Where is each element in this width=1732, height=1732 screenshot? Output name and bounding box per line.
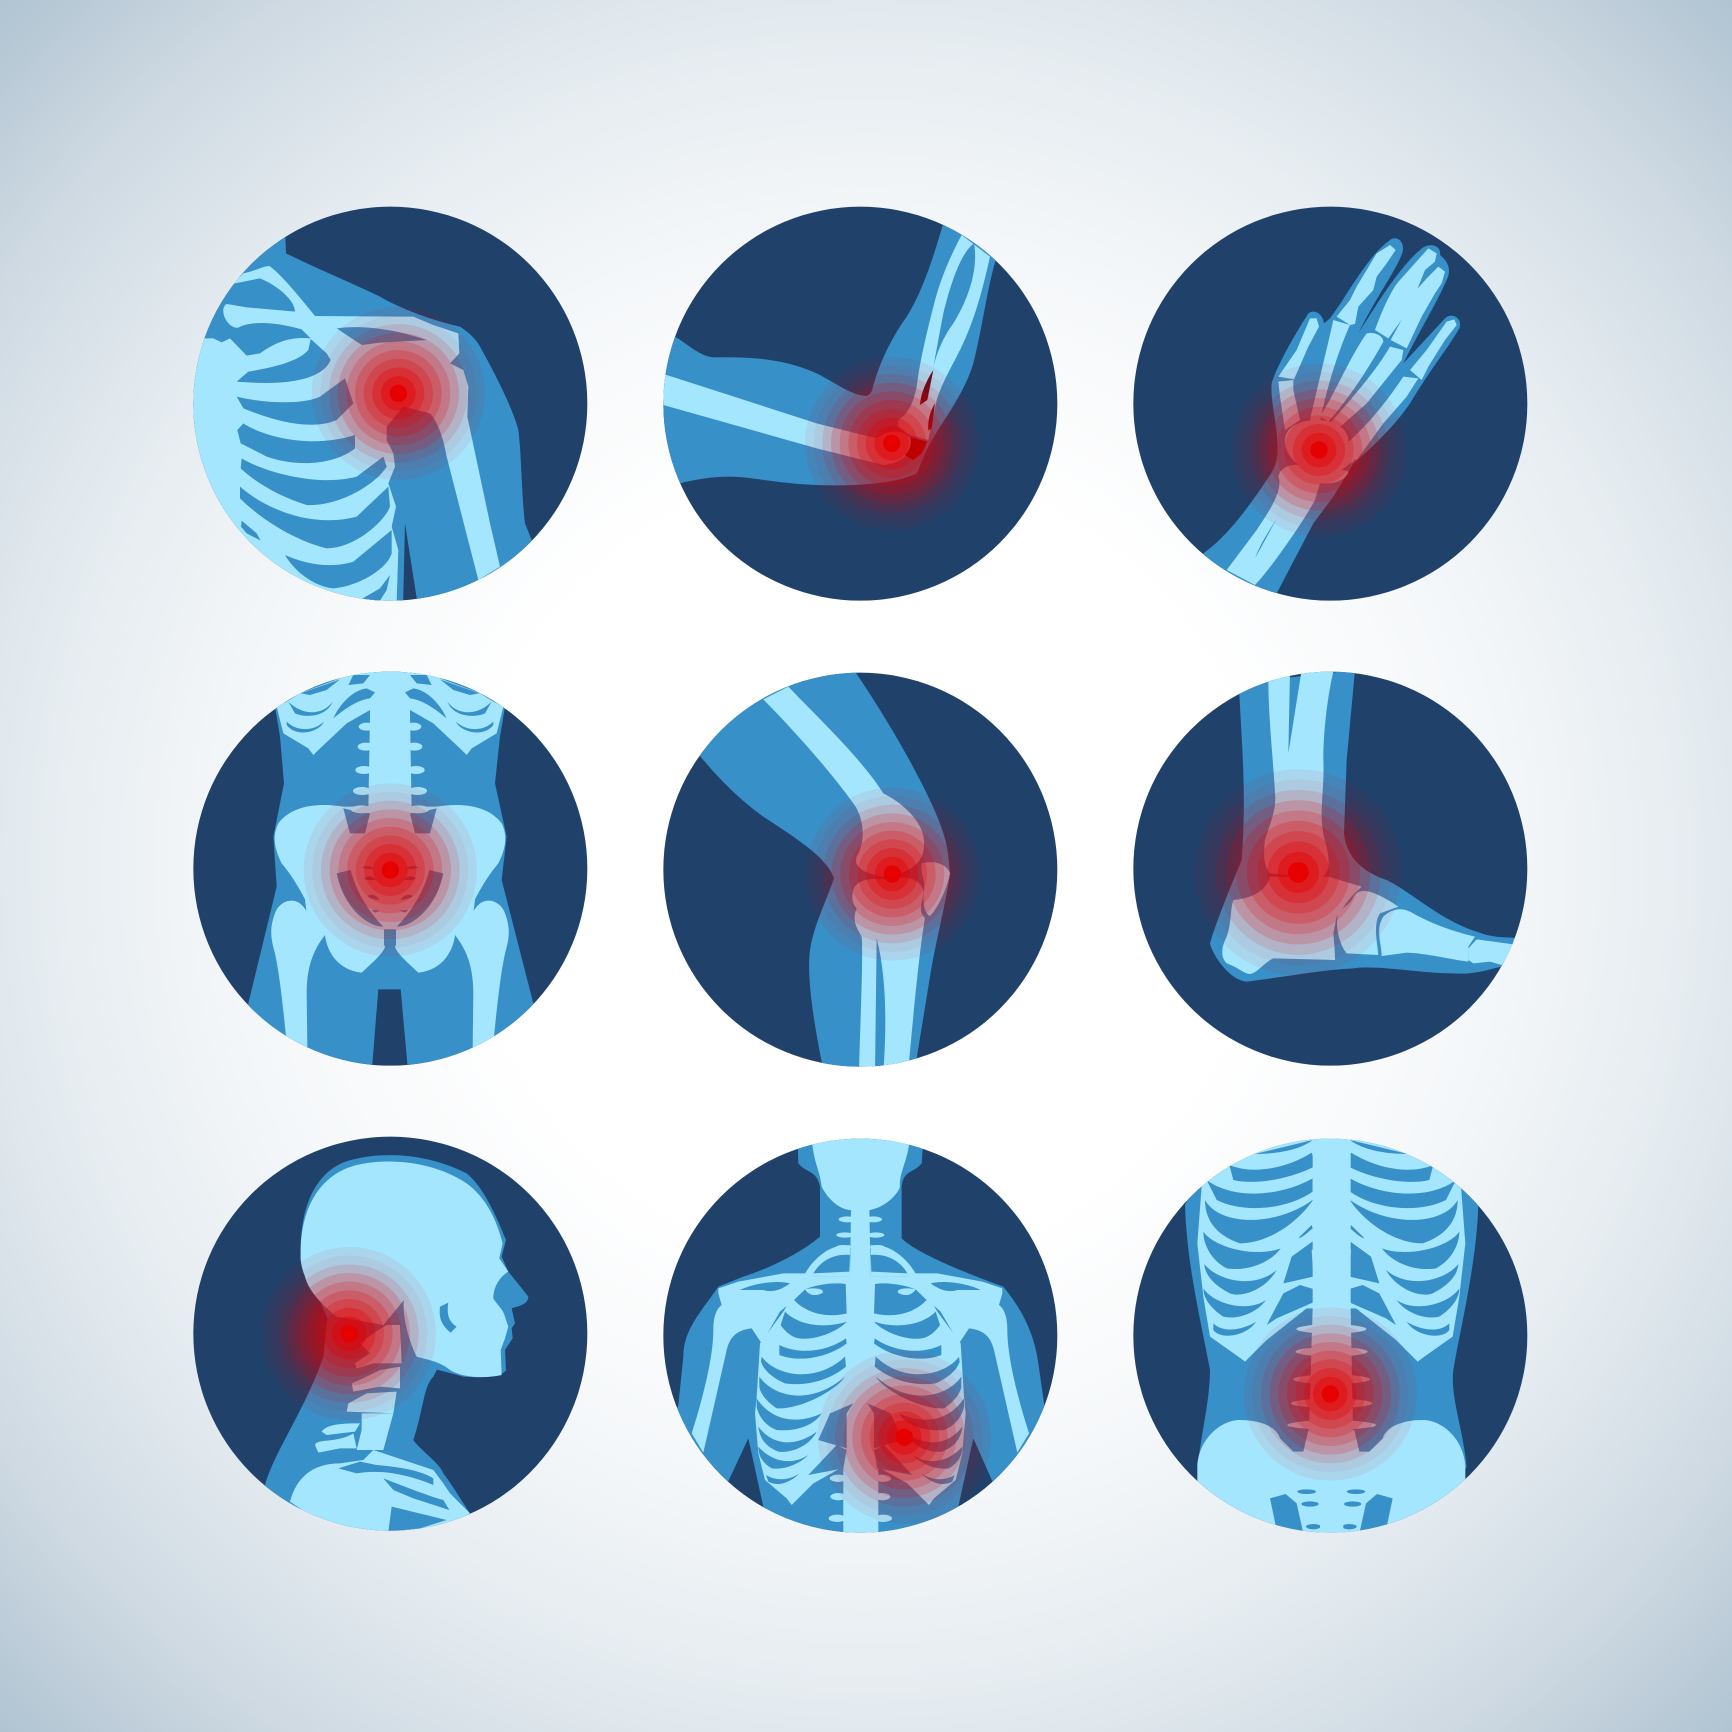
spine and ribcage skeleton <box>1185 1130 1478 1563</box>
torso skeleton <box>677 1138 1044 1533</box>
pain rings <box>1195 769 1401 975</box>
hand skeleton <box>1203 238 1460 623</box>
panel: neck pain <box>193 1137 587 1563</box>
pain rings <box>263 1247 436 1420</box>
middle finger <box>1320 333 1383 422</box>
circle backdrop <box>663 207 1057 601</box>
circle backdrop <box>193 207 587 601</box>
pelvis skeleton <box>248 660 533 1093</box>
circle backdrop <box>663 1139 1057 1533</box>
panel: hip and pelvis pain <box>193 660 587 1093</box>
circle backdrop <box>193 672 587 1066</box>
thumb <box>1278 380 1300 430</box>
panel: elbow pain <box>650 207 1057 601</box>
shoulder skeleton <box>193 237 532 601</box>
fracture shade <box>905 437 927 460</box>
pain rings <box>312 307 485 480</box>
spine column <box>1309 1138 1353 1430</box>
circle backdrop <box>1133 207 1527 601</box>
ring finger <box>1330 347 1403 430</box>
panel: lower back pain <box>1133 1130 1527 1563</box>
panel: shoulder pain <box>180 207 587 623</box>
panel: chest and rib pain <box>663 1130 1057 1563</box>
pain rings <box>1232 363 1406 537</box>
index finger <box>1310 320 1350 422</box>
circle backdrop <box>663 673 1057 1067</box>
circle backdrop <box>193 1137 587 1531</box>
pain rings <box>818 1351 991 1524</box>
little finger <box>1347 377 1418 460</box>
pain rings <box>1244 1307 1417 1481</box>
pain rings <box>304 783 477 957</box>
elbow skeleton <box>650 223 997 490</box>
panel: ankle pain <box>1133 668 1527 1066</box>
knee skeleton <box>700 660 950 1093</box>
pain rings <box>806 787 979 961</box>
panel: wrist pain <box>1133 207 1527 623</box>
circle backdrop <box>1133 1139 1527 1533</box>
panel: knee pain <box>663 660 1057 1093</box>
circle backdrop <box>1133 672 1527 1066</box>
foot skeleton <box>1210 668 1518 982</box>
head and neck skeleton <box>265 1155 528 1563</box>
pain rings <box>805 357 978 530</box>
